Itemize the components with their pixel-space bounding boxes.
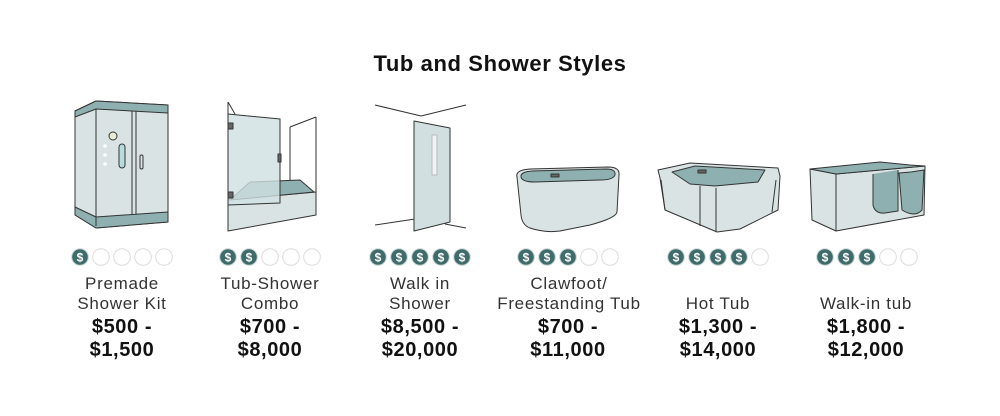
price: $8,500 - [381, 316, 459, 338]
price: $14,000 [680, 339, 756, 361]
rating: 5 of 5 [370, 249, 470, 265]
rating: 1 of 5 [72, 249, 172, 265]
icon: hot tub [658, 163, 780, 232]
column: walk in shower [370, 105, 470, 361]
price: $1,300 - [679, 316, 757, 338]
column: premade shower kit [72, 101, 172, 361]
icon: premade shower kit [75, 101, 168, 228]
label: Clawfoot/ [530, 274, 608, 293]
label: Premade [85, 274, 159, 293]
rating: 2 of 5 [220, 249, 320, 265]
label: Shower Kit [77, 294, 167, 313]
icon: tub-shower combo [228, 102, 316, 231]
label: Shower [389, 294, 451, 313]
price: $500 - [92, 316, 152, 338]
label: Walk-in tub [820, 294, 912, 313]
label: Combo [241, 294, 299, 313]
price: $20,000 [382, 339, 458, 361]
label: Walk in [390, 274, 450, 293]
label: Freestanding Tub [497, 294, 641, 313]
rating: 3 of 5 [518, 249, 618, 265]
rating: 4 of 5 [668, 249, 768, 265]
column: tub-shower combo [220, 102, 320, 361]
rating: 3 of 5 [817, 249, 917, 265]
price: $1,800 - [827, 316, 905, 338]
price: $8,000 [238, 339, 302, 361]
label: Hot Tub [686, 294, 750, 313]
price: $11,000 [530, 339, 606, 361]
price: $12,000 [828, 339, 904, 361]
column: clawfoot tub [497, 167, 641, 361]
column: walk-in tub [810, 162, 925, 361]
title: Tub and Shower Styles [373, 51, 627, 76]
price: $700 - [240, 316, 300, 338]
label: Tub-Shower [221, 274, 319, 293]
price: $1,500 [90, 339, 154, 361]
icon: walk-in tub [810, 162, 925, 231]
icon: walk in shower [375, 105, 466, 231]
price: $700 - [538, 316, 598, 338]
icon: freestanding tub [517, 167, 619, 232]
column: hot tub [658, 163, 780, 361]
